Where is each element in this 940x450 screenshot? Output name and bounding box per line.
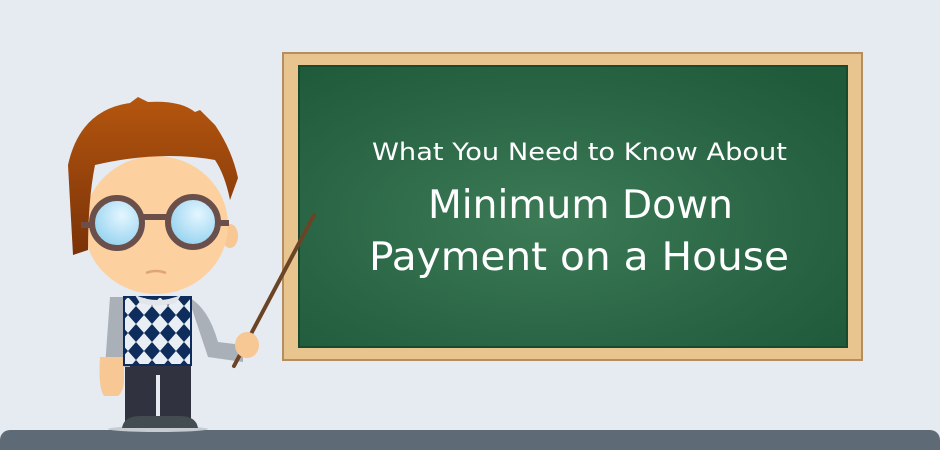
face: [84, 156, 228, 294]
title text: Payment on a House: [369, 235, 789, 280]
title text: What You Need to Know About: [372, 138, 787, 166]
character: teacher: [68, 97, 314, 432]
pointer stick: [234, 215, 314, 366]
mouth: [146, 271, 166, 273]
collar: [135, 295, 181, 306]
ears: [74, 226, 90, 250]
title text: Minimum Down: [428, 183, 733, 228]
hand right: [235, 332, 259, 358]
hair: [68, 97, 238, 255]
floor bar: [0, 430, 940, 450]
title text: [369, 138, 789, 280]
shoes: [122, 416, 198, 428]
glasses: [81, 197, 229, 248]
sleeves: [105, 297, 130, 367]
panel: chalkboard: [283, 53, 862, 360]
pants: [125, 362, 191, 424]
vest: [124, 297, 191, 365]
hand left: [100, 357, 124, 396]
